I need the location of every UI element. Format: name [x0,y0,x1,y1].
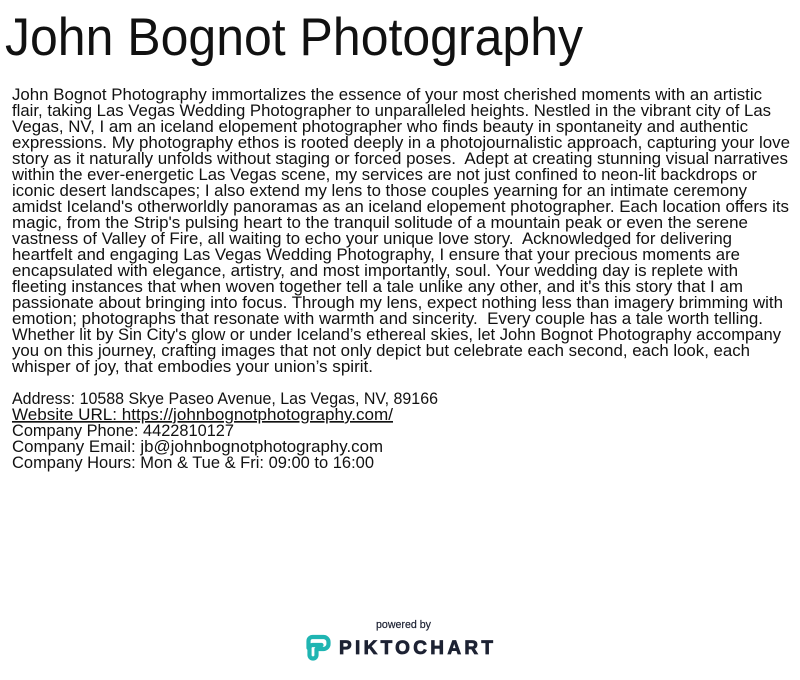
text block: description: Vegas, NV, I am an iceland elopement photographer who finds beauty in spontaneity and authentic [12,117,748,136]
wordmark: PIKTOCHART [339,638,493,659]
text block: description: magic, from the Strip's pulsing heart to the tranquil solitude of a mountain peak or even the serene [12,213,748,232]
text block: contact details: Company Phone: 4422810127 [12,421,234,440]
text block: description: flair, taking Las Vegas Wedding Photographer to unparalleled heights. Nestled in the vibrant city of Las [12,101,771,120]
text block: description: heartfelt and engaging Las Vegas Wedding Photography, I ensure that your precious moments are [12,245,740,264]
text block: description: amidst Iceland's otherworldly panoramas as an iceland elopement photographer. Each location offers its [12,197,789,216]
text block: contact details: Address: 10588 Skye Paseo Avenue, Las Vegas, NV, 89166 [12,389,438,408]
text block: description: John Bognot Photography immortalizes the essence of your most cherished moments with an artistic [12,85,762,104]
text block: description: you on this journey, crafting images that not only depict but celebrate each second, each look, each [12,341,750,360]
text block: description: iconic desert landscapes; I also extend my lens to those couples yearning for an intimate ceremony [12,181,748,200]
text block: contact details: Website URL: https://johnbognotphotography.com/ [12,405,393,424]
footer: powered by Piktochart logo [308,619,493,659]
text block: contact details: Company Hours: Mon & Tue & Fri: 09:00 to 16:00 [12,453,374,472]
icon: Piktochart P mark [308,637,328,659]
text block: description: vastness of Valley of Fire, all waiting to echo your unique love story. Acknowledged for delivering [12,229,732,248]
text block: description: expressions. My photography ethos is rooted deeply in a photojournalistic approach, capturing your love [12,133,790,152]
text block: description: emotion; photographs that resonate with warmth and sincerity. Every couple has a tale worth telling. [12,309,763,328]
text block: description: whisper of joy, that embodies your union’s spirit. [11,357,373,376]
text block: contact details: Company Email: jb@johnbognotphotography.com [12,437,383,456]
text block: description: passionate about bringing into focus. Through my lens, expect nothing less than imagery brimming with [12,293,783,312]
text block: contact details [12,389,438,472]
text block: description [11,85,790,376]
text block: description: within the ever-energetic Las Vegas scene, my services are not just confined to neon-lit backdrops or [11,165,757,184]
text block: description: story as it naturally unfolds without staging or forced poses. Adept at creating stunning visual narratives [12,149,788,168]
text block: description: encapsulated with elegance, artistry, and most importantly, soul. Your wedding day is replete with [12,261,738,280]
title: John Bognot Photography [5,8,583,67]
text block: description: Whether lit by Sin City's glow or under Iceland’s ethereal skies, let John Bognot Photography accompany [12,325,782,344]
powered by label: powered by [376,619,431,631]
text block: description: fleeting instances that when woven together tell a tale unlike any other, and it's this story that I am [12,277,743,296]
